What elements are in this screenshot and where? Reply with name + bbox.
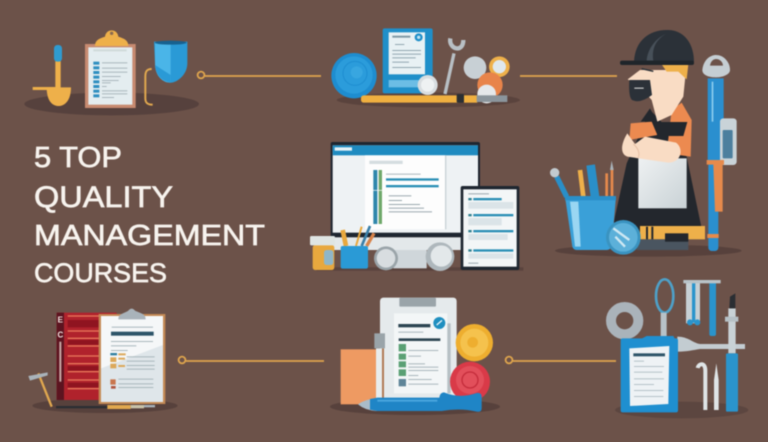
icon: tall screwdriver: [725, 293, 738, 412]
connector: top right: [520, 75, 617, 77]
icon: small silver ball: [418, 75, 438, 95]
worker figure: [612, 30, 703, 237]
icon: needle tool: [714, 363, 719, 410]
icon: tube tools: [683, 280, 721, 336]
icon: clipboard: [380, 298, 457, 401]
illustration: computer monitor and tablet: [310, 142, 523, 271]
icon: tape roll: [611, 307, 638, 334]
icon: hook tool: [698, 364, 705, 410]
connector: top left: [198, 72, 321, 78]
illustration: red book, clipboard and hammer: [28, 309, 178, 413]
title line: 5 TOP: 5 TOP: [34, 142, 122, 174]
icon group: scoop, clipboard and cup: [24, 30, 199, 115]
icon: pencil cup: [341, 226, 374, 269]
illustration: worker with tools: [550, 30, 742, 257]
icon: magnifier left: [374, 246, 398, 270]
illustration: clipboard and hand tools: [611, 279, 748, 418]
icon group: disc, tablet, wrench and pencil: [331, 28, 520, 107]
icon: screwdriver: [358, 392, 482, 412]
icon: wrench: [445, 38, 463, 94]
title: [34, 142, 265, 288]
icon: red coin: [450, 362, 490, 402]
title line: COURSES: COURSES: [34, 258, 167, 288]
icon: magnifier: [606, 220, 641, 255]
tablet: [461, 186, 519, 270]
icon: fork wrench: [677, 337, 745, 352]
icon: pen: [56, 405, 155, 409]
title line: QUALITY: QUALITY: [34, 181, 173, 214]
icon: red binder: C: [57, 330, 63, 339]
icon: bracket: [145, 69, 153, 105]
icon: jar: [310, 236, 335, 270]
connector: bottom left: [179, 357, 324, 363]
icon: scoop: [33, 45, 71, 106]
icon: orange book: [341, 349, 377, 404]
icon: magnifier right: [426, 242, 454, 271]
icon: pen cup: [550, 161, 616, 250]
icon: blue disc: [331, 53, 377, 98]
icon: red binder: E: [58, 316, 64, 325]
icon: blue tablet: [383, 28, 433, 93]
icon: clipboard checklist: [85, 30, 136, 108]
icon: test tube: [374, 333, 385, 398]
icon: balls cluster: [464, 56, 510, 103]
icon: yellow coin: [456, 324, 493, 361]
icon: blue clipboard: [621, 336, 678, 412]
monitor: [331, 142, 480, 268]
icon: red binder: [57, 313, 117, 400]
icon: clipboard document: [99, 309, 165, 404]
title line: MANAGEMENT: MANAGEMENT: [34, 220, 265, 252]
connector: bottom right: [506, 357, 616, 363]
icon: pliers: [656, 279, 673, 337]
icon: pencil: [361, 94, 507, 103]
icon: hammer: [28, 372, 52, 407]
illustration: clipboard, coins and screwdriver: [330, 298, 500, 415]
icon: large wrench: [702, 55, 737, 251]
icon: drill: [637, 226, 705, 250]
icon: blue cup: [154, 41, 187, 83]
